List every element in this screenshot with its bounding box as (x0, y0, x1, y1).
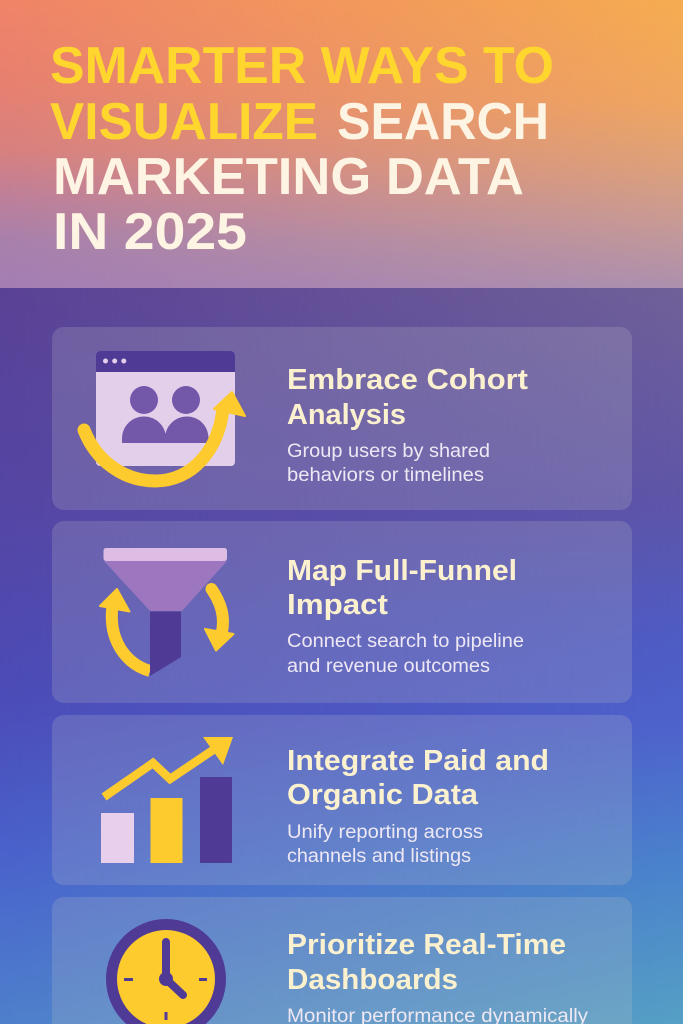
description (287, 441, 490, 486)
description: and revenue outcomes (287, 656, 490, 677)
panel: full-funnel impact (52, 521, 632, 703)
heading: Integrate Paid and (287, 745, 549, 777)
icon: bar chart with rising arrow (101, 737, 233, 863)
title: SMARTER WAYS TO (50, 37, 554, 95)
heading: Embrace Cohort (287, 364, 528, 396)
description (287, 822, 483, 867)
title: MARKETING DATA (53, 148, 524, 206)
description: Group users by shared (287, 441, 490, 462)
panel: paid and organic data: Organic Data (287, 779, 479, 811)
title (50, 37, 554, 261)
description: Unify reporting across (287, 822, 483, 843)
heading: Map Full-Funnel (287, 555, 517, 587)
description: behaviors or timelines (287, 465, 484, 486)
description: channels and listings (287, 846, 471, 867)
panel: paid and organic data (52, 715, 632, 885)
panel: real-time dashboards (52, 897, 632, 1024)
card background (52, 897, 632, 1024)
icon: clock (106, 919, 226, 1024)
icon: browser window with users and arrow (84, 351, 245, 481)
title: IN 2025 (53, 203, 247, 261)
card background (52, 715, 632, 885)
body background (0, 288, 683, 1024)
title: VISUALIZE (50, 93, 318, 151)
card background (52, 327, 632, 510)
heading: Prioritize Real-Time (287, 929, 566, 961)
icon: funnel with arrows (100, 548, 234, 676)
title: SEARCH (337, 93, 549, 151)
panel: cohort analysis (52, 327, 632, 510)
header background (0, 0, 683, 288)
panel: full-funnel impact: Impact (287, 589, 388, 621)
description (287, 631, 524, 677)
panel: real-time dashboards: Dashboards (287, 964, 458, 996)
panel: cohort analysis: Analysis (287, 399, 406, 431)
description: Connect search to pipeline (287, 631, 524, 652)
card background (52, 521, 632, 703)
